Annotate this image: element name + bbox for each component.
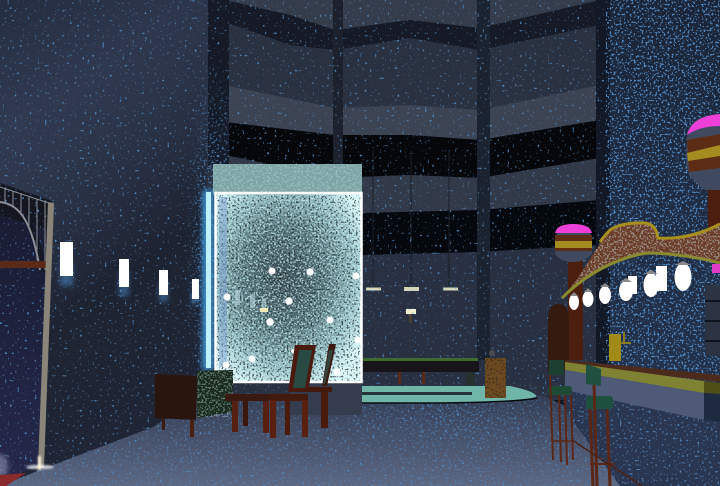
case top block [213, 164, 362, 194]
arched bar door [548, 304, 569, 372]
right wall [596, 0, 720, 425]
round table [225, 394, 269, 433]
green armchair [197, 370, 233, 418]
bar shelf [705, 285, 720, 355]
glowing vertical light strip [202, 190, 214, 370]
gold beer tap [609, 332, 631, 361]
atrium columns [333, 0, 490, 360]
bar stools [548, 360, 642, 486]
billiard table [363, 358, 479, 394]
case base [290, 382, 362, 415]
pendant lamps over billiard table [366, 150, 458, 323]
near chair [269, 345, 316, 438]
lounge chairs and table [155, 344, 336, 438]
bar counter [565, 360, 720, 486]
glass panel [215, 194, 362, 382]
stool left [548, 360, 573, 465]
atrium back wall [205, 0, 605, 400]
ornate gold-trimmed bar canopy [560, 220, 720, 300]
glass display case [213, 164, 362, 415]
doorway with arch grille [0, 183, 52, 480]
side cabinet [485, 350, 506, 398]
canopy bulbs [569, 261, 692, 310]
left wall [0, 0, 229, 486]
far chair [306, 344, 336, 428]
bar pendant pillar lamp, small [555, 224, 592, 360]
brown armchair [155, 374, 197, 437]
doorway frame and grille detail [0, 187, 54, 486]
teal rug [362, 386, 537, 403]
bar pendant pillar lamp, large [686, 114, 720, 230]
reflected sconces [235, 290, 268, 312]
stool right [572, 364, 642, 486]
reflected highlights [222, 268, 362, 376]
wall sconces [60, 242, 199, 304]
floor [0, 395, 720, 486]
